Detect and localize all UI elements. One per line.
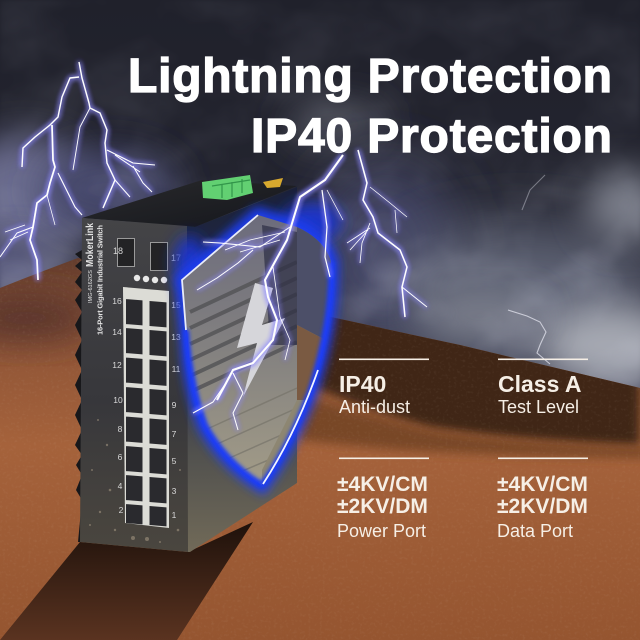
port numbers	[112, 246, 181, 520]
green terminal block	[202, 175, 253, 200]
desert dunes	[0, 250, 640, 640]
title line 1: Lightning Protection	[128, 50, 612, 103]
industrial switch	[75, 175, 297, 552]
blue haze around the shield	[174, 202, 342, 288]
vertical product labels: MokerLink	[85, 223, 96, 267]
port numbers: 9	[172, 400, 177, 410]
spec: power port surge ratings: ±4KV/CM	[337, 473, 428, 496]
spec: data port surge ratings: Data Port	[497, 521, 573, 541]
spec: IP40 anti-dust	[339, 358, 429, 417]
SFP port 17	[150, 242, 168, 270]
title line 2: IP40 Protection	[251, 110, 612, 163]
spec: IP40 anti-dust: IP40	[339, 371, 386, 397]
shield white highlight right	[263, 370, 318, 484]
spec: IP40 anti-dust: Anti-dust	[339, 397, 410, 417]
spec: Class A test level: Class A	[498, 371, 582, 397]
lightning bolts in the sky, left	[0, 62, 155, 280]
spec: data port surge ratings: ±4KV/CM	[497, 473, 588, 496]
RJ45 port grid	[123, 287, 169, 528]
port numbers: 5	[172, 456, 177, 466]
port numbers: 17	[171, 253, 181, 263]
yellow grounding nut	[263, 178, 283, 188]
shield outer blue glow	[182, 215, 331, 485]
spec: power port surge ratings: ±2KV/DM	[337, 495, 428, 518]
vertical product labels	[85, 223, 104, 335]
spec: power port surge ratings	[337, 458, 429, 541]
port numbers: 16	[112, 296, 122, 306]
heat sink fins	[190, 262, 297, 392]
port numbers: 3	[172, 486, 177, 496]
faint distant lightning bolts	[508, 175, 550, 364]
title	[128, 50, 612, 163]
port numbers: 11	[172, 364, 181, 374]
port numbers: 13	[171, 332, 181, 342]
port numbers: 2	[119, 505, 124, 515]
status LEDs	[134, 275, 167, 283]
port numbers: 14	[112, 327, 122, 337]
lightning bolt emblem	[237, 283, 285, 397]
spec: data port surge ratings: ±2KV/DM	[497, 495, 588, 518]
port numbers: 1	[172, 510, 177, 520]
sky seen through the shield	[297, 227, 331, 338]
port numbers: 10	[113, 395, 123, 405]
port numbers: 6	[118, 452, 123, 462]
vertical product labels: IMG-6162GS	[88, 269, 94, 303]
shield blue inner rim	[186, 330, 262, 485]
blue shield overlay	[174, 155, 343, 495]
lightning through the shield	[193, 155, 343, 430]
spec: power port surge ratings: Power Port	[337, 521, 426, 541]
top face	[82, 180, 297, 227]
shield right rim	[262, 262, 331, 485]
port numbers: 15	[171, 300, 181, 310]
vertical product labels: 16-Port Gigabit Industrial Switch	[96, 225, 104, 335]
lightning bolts in the sky, right	[347, 150, 427, 317]
port numbers: 18	[113, 246, 123, 256]
port numbers: 7	[172, 429, 177, 439]
spec: data port surge ratings	[497, 458, 588, 541]
left mounting teeth	[75, 250, 82, 542]
port numbers: 4	[118, 481, 123, 491]
stormy sky background	[0, 0, 640, 400]
spec: Class A test level: Test Level	[498, 397, 579, 417]
port numbers: 8	[118, 424, 123, 434]
side face	[187, 187, 297, 552]
spec: Class A test level	[498, 358, 588, 417]
dark fin shadow	[262, 225, 297, 345]
front face	[80, 218, 188, 552]
dust speckle	[89, 419, 181, 543]
switch shadow on sand	[0, 522, 253, 640]
shield body	[183, 215, 331, 485]
SFP port 18	[118, 238, 134, 266]
shield white highlight left	[182, 215, 258, 330]
port numbers: 12	[112, 360, 122, 370]
sand seen through the shield	[297, 325, 323, 400]
